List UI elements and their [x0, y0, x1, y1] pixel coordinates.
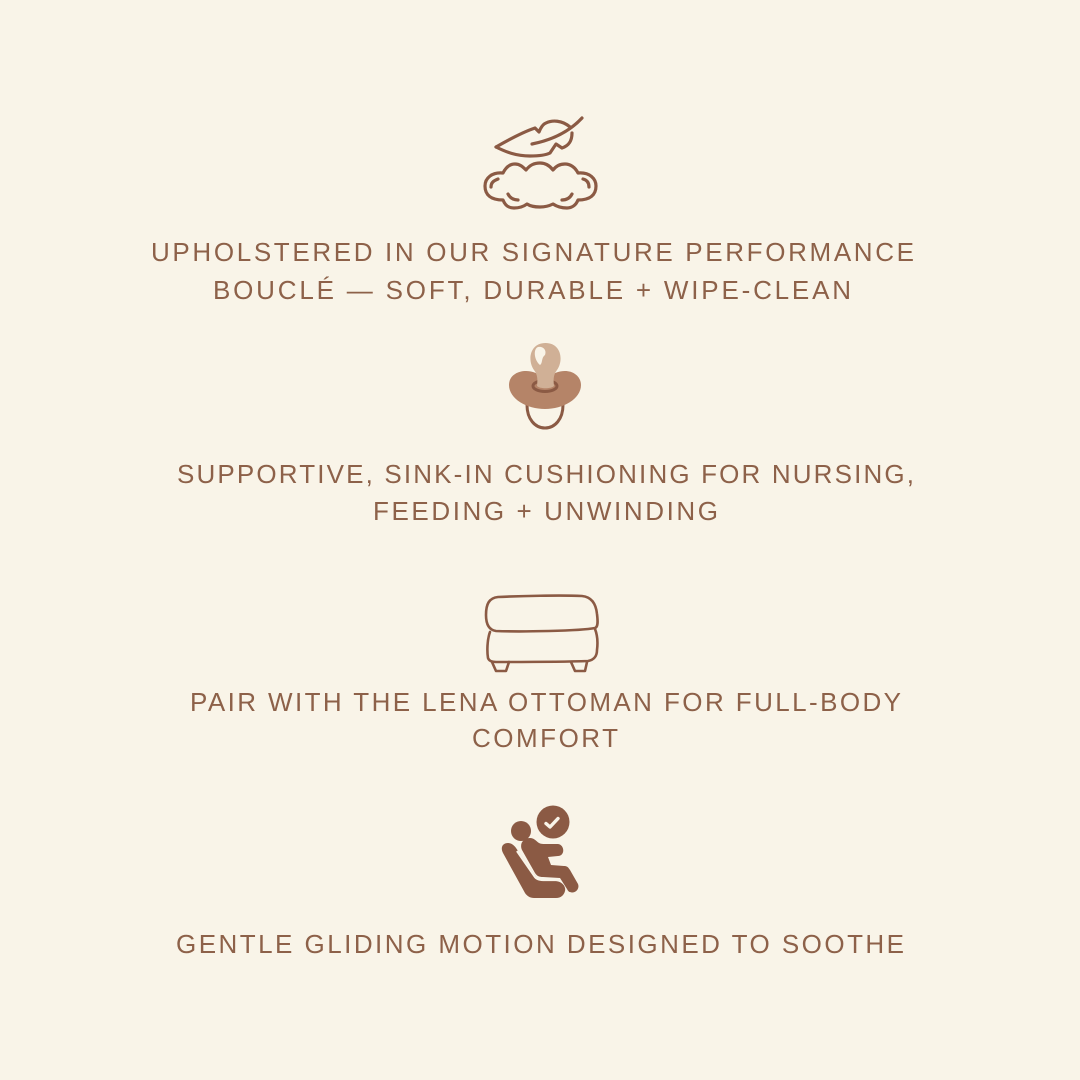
heading: ottoman text: PAIR WITH THE LENA OTTOMAN FOR FULL-BODY [190, 687, 901, 717]
heading: cushioning text: SUPPORTIVE, SINK-IN CUSHIONING FOR NURSING, [177, 459, 914, 489]
heading: cushioning text [177, 459, 914, 526]
heading: boucle text [151, 237, 914, 305]
heading: boucle text: UPHOLSTERED IN OUR SIGNATURE PERFORMANCE [151, 237, 914, 267]
icon: ottoman [486, 596, 598, 671]
heading: ottoman text: COMFORT [472, 723, 618, 753]
heading: cushioning text: FEEDING + UNWINDING [373, 496, 718, 526]
icon: seated person with check [502, 806, 578, 898]
heading: gliding text: GENTLE GLIDING MOTION DESIGNED TO SOOTHE [176, 929, 904, 959]
icon: pacifier [509, 343, 581, 428]
heading: ottoman text [190, 687, 901, 753]
icon: feather over cloud [485, 118, 596, 208]
heading: boucle text: BOUCLÉ — SOFT, DURABLE + WIPE-CLEAN [213, 275, 851, 305]
